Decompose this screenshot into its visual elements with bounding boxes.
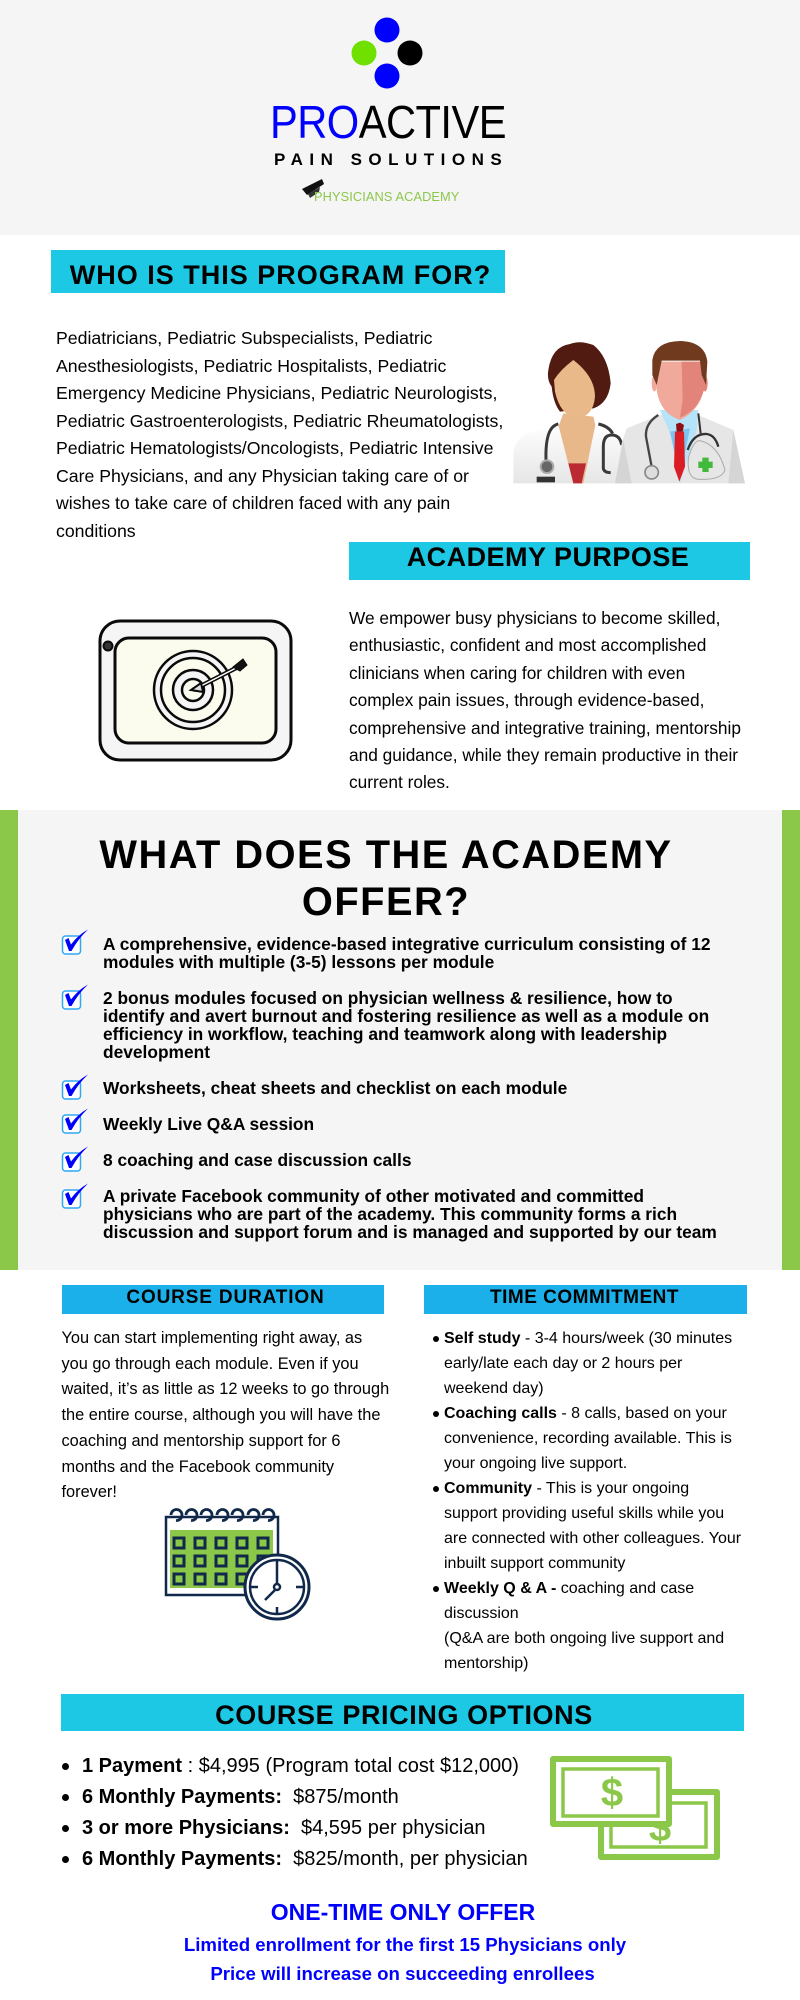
checkbox 1 bbox=[62, 930, 88, 955]
text: course duration: coaching and mentorship support for 6 bbox=[62, 1432, 340, 1450]
text: audience: Pediatricians, Pediatric Subspecialists, Pediatric bbox=[56, 328, 433, 348]
bullet: self study: Self study - 3-4 hours/week (30 minutes bbox=[444, 1330, 732, 1347]
offer item 1: modules with multiple (3-5) lessons per module bbox=[103, 952, 494, 972]
icon: two doctors bbox=[514, 341, 745, 484]
offer item 3: Worksheets, cheat sheets and checklist on each module bbox=[103, 1078, 567, 1098]
checkbox 5 bbox=[62, 1146, 88, 1172]
offer item 6: A private Facebook community of other motivated and committed bbox=[103, 1186, 644, 1206]
bullet: community: inbuilt support community bbox=[444, 1555, 625, 1572]
logo subtitle: PAIN SOLUTIONS bbox=[274, 150, 508, 169]
offer item 6: discussion and support forum and is managed and supported by our team bbox=[103, 1222, 717, 1242]
heading: offer: WHAT DOES THE ACADEMY OFFER? bbox=[99, 833, 673, 924]
text: course duration: You can start implementing right away, as bbox=[62, 1329, 362, 1347]
text: course duration: forever! bbox=[62, 1483, 117, 1501]
heading: course duration bbox=[62, 1285, 384, 1314]
checkbox 4 bbox=[62, 1108, 88, 1134]
heading: who is this program for: WHO IS THIS PROGRAM FOR? bbox=[70, 260, 491, 290]
text: course duration: months and the Facebook community bbox=[62, 1458, 334, 1476]
icon: money bills bbox=[550, 1756, 720, 1860]
heading: academy purpose: ACADEMY PURPOSE bbox=[407, 542, 689, 572]
icon: money bills: $ bbox=[601, 1771, 623, 1815]
list: pricing bbox=[62, 1755, 528, 1870]
heading: one-time offer: ONE-TIME ONLY OFFER bbox=[271, 1899, 535, 1925]
text: purpose: We empower busy physicians to become skilled, bbox=[349, 608, 720, 628]
offer item 1: A comprehensive, evidence-based integrative curriculum consisting of 12 bbox=[103, 934, 711, 954]
text: purpose: complex pain issues, through evidence-based, bbox=[349, 690, 704, 710]
text: purpose: current roles. bbox=[349, 772, 450, 792]
heading: who is this program for bbox=[51, 250, 505, 293]
text: purpose: and guidance, while they remain productive in their bbox=[349, 745, 738, 765]
green side bar right bbox=[782, 810, 800, 1270]
bullet: coaching calls: convenience, recording available. This is bbox=[444, 1430, 732, 1447]
text: audience: Emergency Medicine Physicians, Pediatric Neurologists, bbox=[56, 383, 497, 403]
text: purpose: clinicians when caring for children with even bbox=[349, 663, 685, 683]
text: purpose: comprehensive and integrative training, mentorship bbox=[349, 718, 741, 738]
list: time commitment bbox=[433, 1330, 741, 1672]
icon: money bills: $ bbox=[649, 1806, 671, 1850]
heading: course pricing options bbox=[61, 1694, 744, 1731]
icon: calendar and clock bbox=[164, 1508, 310, 1620]
offer item 4: Weekly Live Q&A session bbox=[103, 1114, 314, 1134]
bullet: community bbox=[433, 1480, 741, 1572]
heading: academy purpose bbox=[349, 542, 750, 580]
bullet: weekly q and a: discussion bbox=[444, 1605, 519, 1622]
heading: course pricing options: COURSE PRICING OPTIONS bbox=[215, 1700, 593, 1730]
heading: time commitment: TIME COMMITMENT bbox=[490, 1287, 679, 1308]
bullet: weekly q and a: (Q&A are both ongoing live support and bbox=[444, 1630, 724, 1647]
academy label: PHYSICIANS ACADEMY bbox=[314, 189, 459, 204]
offer item 2 bbox=[103, 988, 709, 1062]
panel: what does the academy offer bbox=[0, 810, 800, 1270]
text: limited enrollment: Price will increase on succeeding enrollees bbox=[210, 1963, 595, 1984]
bullet: coaching calls: your ongoing live support. bbox=[444, 1455, 627, 1472]
text: audience bbox=[56, 328, 503, 540]
offer item 2: identify and avert burnout and fostering resilience as well as a module on bbox=[103, 1006, 709, 1026]
checkbox 2 bbox=[62, 984, 88, 1010]
text: purpose bbox=[349, 608, 741, 792]
text: audience: wishes to take care of children faced with any pain bbox=[56, 493, 450, 513]
logo dots bbox=[352, 18, 422, 88]
offer item 1 bbox=[103, 934, 711, 972]
offer item 5: 8 coaching and case discussion calls bbox=[103, 1150, 411, 1170]
bullet: self study bbox=[433, 1330, 732, 1397]
text: purpose: enthusiastic, confident and most accomplished bbox=[349, 635, 706, 655]
checkbox 3 bbox=[62, 1074, 88, 1100]
bullet: self study: early/late each day or 2 hours per bbox=[444, 1355, 682, 1372]
bullet: community: Community - This is your ongoing bbox=[444, 1480, 689, 1497]
green side bar left bbox=[0, 810, 18, 1270]
icon: graduation cap bbox=[302, 179, 324, 198]
bullet: coaching calls: Coaching calls - 8 calls, based on your bbox=[444, 1405, 727, 1422]
text: audience: Care Physicians, and any Physician taking care of or bbox=[56, 466, 469, 486]
bullet: weekly q and a: Weekly Q & A - coaching and case bbox=[444, 1580, 694, 1597]
text: course duration: waited, it’s as little as 12 weeks to go through bbox=[62, 1380, 389, 1398]
text: audience: Pediatric Gastroenterologists, Pediatric Rheumatologists, bbox=[56, 410, 503, 430]
header band bbox=[0, 0, 800, 235]
text: course duration: the entire course, although you will have the bbox=[62, 1406, 380, 1424]
checkbox 6 bbox=[62, 1184, 88, 1209]
offer item 6: physicians who are part of the academy. This community forms a rich bbox=[103, 1204, 677, 1224]
logo wordmark: PROACTIVE bbox=[270, 96, 506, 148]
price 1: 1 Payment : $4,995 (Program total cost $12,000) bbox=[82, 1755, 519, 1777]
text: audience: Pediatric Hematologists/Oncologists, Pediatric Intensive bbox=[56, 438, 493, 458]
price 3: 3 or more Physicians: $4,595 per physician bbox=[82, 1817, 486, 1839]
bullet: weekly q and a bbox=[433, 1580, 724, 1672]
bullet: self study: weekend day) bbox=[444, 1380, 544, 1397]
price 2: 6 Monthly Payments: $875/month bbox=[82, 1786, 399, 1808]
bullet: community: are connected with other colleagues. Your bbox=[444, 1530, 741, 1547]
offer item 2: efficiency in workflow, teaching and teamwork along with leadership bbox=[103, 1024, 667, 1044]
text: course duration bbox=[62, 1329, 389, 1501]
text: limited enrollment bbox=[184, 1934, 626, 1984]
bullet: coaching calls bbox=[433, 1405, 732, 1472]
text: audience: Anesthesiologists, Pediatric Hospitalists, Pediatric bbox=[56, 356, 446, 376]
offer item 2: development bbox=[103, 1042, 210, 1062]
text: audience: conditions bbox=[56, 520, 136, 540]
bullet: community: support providing useful skills while you bbox=[444, 1505, 724, 1522]
price 4: 6 Monthly Payments: $825/month, per physician bbox=[82, 1848, 528, 1870]
text: limited enrollment: Limited enrollment for the first 15 Physicians only bbox=[184, 1934, 626, 1955]
icon: target bbox=[98, 620, 292, 762]
text: course duration: you go through each module. Even if you bbox=[62, 1355, 359, 1373]
bullet: weekly q and a: mentorship) bbox=[444, 1655, 528, 1672]
heading: time commitment bbox=[424, 1285, 747, 1314]
offer item 2: 2 bonus modules focused on physician wellness & resilience, how to bbox=[103, 988, 673, 1008]
offer item 6 bbox=[103, 1186, 717, 1242]
heading: course duration: COURSE DURATION bbox=[126, 1287, 325, 1308]
